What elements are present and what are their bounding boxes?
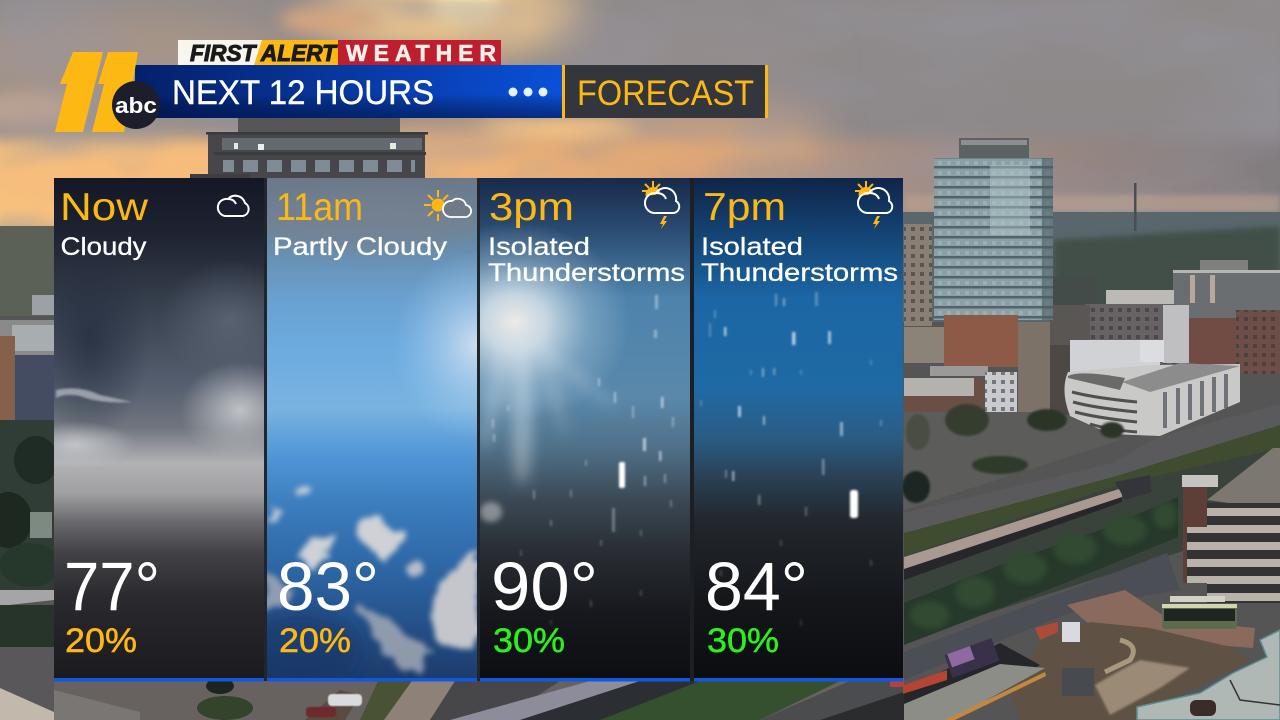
construction xyxy=(1010,622,1250,720)
tree band xyxy=(904,497,1178,645)
logo: ABC 11 xyxy=(55,52,160,132)
logo: ABC 11: abc xyxy=(115,93,157,118)
clouds xyxy=(264,485,478,672)
rain xyxy=(492,295,674,625)
panel: Now xyxy=(54,178,264,682)
condition xyxy=(701,233,898,287)
condition: Isolated xyxy=(701,233,803,261)
train xyxy=(904,488,1122,580)
condition: Partly Cloudy xyxy=(273,233,448,261)
tower xyxy=(959,138,1029,160)
title text: NEXT 12 HOURS xyxy=(172,74,434,112)
rain xyxy=(700,292,882,626)
header banner xyxy=(55,40,768,132)
forecast tab: FORECAST xyxy=(577,74,754,113)
time label: 11am xyxy=(276,186,363,229)
bottom bar xyxy=(267,678,477,682)
center high-rise behind panels xyxy=(190,118,428,178)
curved parking garage xyxy=(1064,364,1240,436)
condition: Thunderstorms xyxy=(701,259,898,287)
left block next to tower xyxy=(904,224,932,326)
panel: 7pm xyxy=(694,178,903,682)
forecast tab xyxy=(562,65,768,118)
panel gap backing: right xyxy=(688,178,696,681)
grass xyxy=(904,425,1280,556)
teal roof xyxy=(1137,630,1280,720)
bottom bar xyxy=(480,678,690,682)
bottom strip xyxy=(54,678,904,720)
precip chance: 30% xyxy=(493,622,565,660)
condition: Isolated xyxy=(488,233,590,261)
plaza xyxy=(1067,590,1255,648)
bottom bar xyxy=(54,678,264,682)
icon: cloud xyxy=(218,196,249,216)
time label: 3pm xyxy=(489,186,574,229)
mid brick row xyxy=(1085,304,1175,364)
bus xyxy=(1162,596,1237,629)
panel: 11am xyxy=(267,178,477,682)
blue title bar xyxy=(135,65,562,118)
precip chance: 20% xyxy=(65,622,137,660)
right city xyxy=(890,138,1280,720)
icon: sun, cloud, lightning xyxy=(642,181,679,229)
left edge city xyxy=(0,295,60,720)
precip chance: 20% xyxy=(279,622,351,660)
time label: 7pm xyxy=(703,186,786,229)
parking deck right xyxy=(1207,448,1280,503)
road xyxy=(904,405,1280,533)
logo: First Alert Weather: FIRST ALERT xyxy=(190,40,338,66)
track bed xyxy=(904,450,1270,615)
lower road xyxy=(904,553,1180,680)
temperature: 84° xyxy=(705,548,808,625)
temperature: 90° xyxy=(491,548,598,625)
distant land xyxy=(0,183,1280,322)
condition: Thunderstorms xyxy=(488,259,685,287)
time label: Now xyxy=(60,186,149,229)
lower brick w windows xyxy=(904,378,984,412)
precip chance: 30% xyxy=(707,622,779,660)
sky xyxy=(0,0,1280,240)
white mid xyxy=(1070,340,1160,375)
trees and parking xyxy=(904,412,1066,422)
condition xyxy=(488,233,685,287)
bottom bar xyxy=(694,678,903,682)
brick tall xyxy=(904,327,944,363)
distant offices xyxy=(1173,270,1280,320)
panel gap backing xyxy=(262,178,482,681)
three dots xyxy=(508,88,548,96)
icon: sun and cloud xyxy=(424,190,471,221)
panel: 3pm xyxy=(480,178,690,682)
temperature: 83° xyxy=(277,548,379,625)
temperature: 77° xyxy=(64,548,160,625)
logo: First Alert Weather xyxy=(178,40,501,66)
condition: Cloudy xyxy=(60,233,147,261)
dark fence / bridge xyxy=(904,643,1040,704)
logo: First Alert Weather: WEATHER xyxy=(346,40,496,66)
cloud wisp xyxy=(56,388,132,402)
icon: sun, cloud, lightning xyxy=(855,181,892,229)
